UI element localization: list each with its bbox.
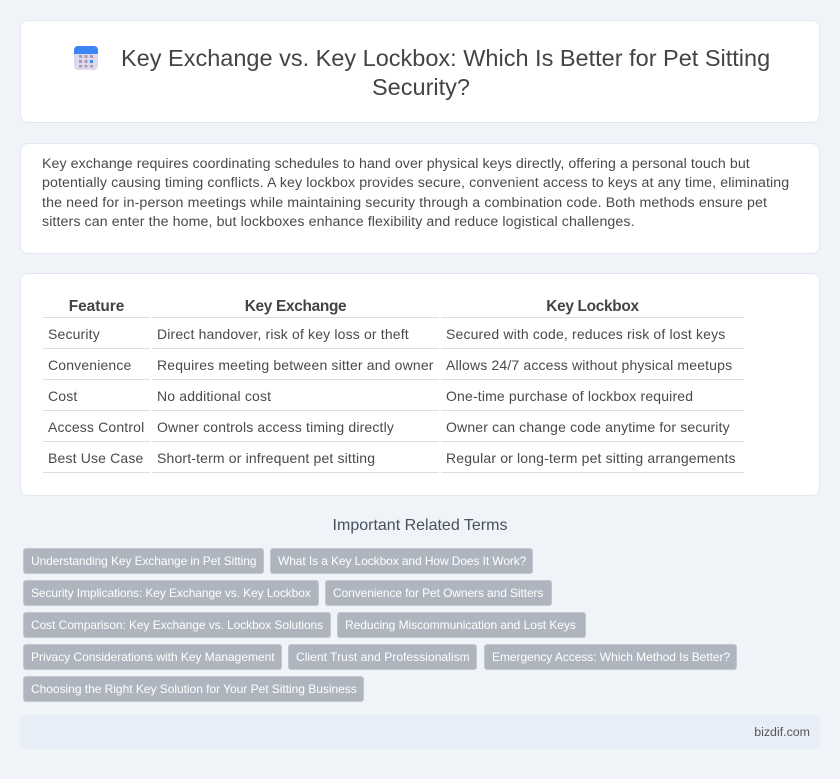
title <box>121 45 770 100</box>
row: cost <box>48 388 693 404</box>
tag: Understanding Key Exchange in Pet Sitting <box>31 554 256 568</box>
title: Security? <box>372 74 470 100</box>
tag <box>23 612 331 638</box>
tag <box>270 548 533 574</box>
intro text: potentially causing timing conflicts. A key lockbox provides secure, convenient access to keys at any time, eliminating <box>42 175 789 191</box>
row: cost: Cost <box>48 388 77 404</box>
related terms heading: Important Related Terms <box>333 517 507 534</box>
footer source: bizdif.com <box>754 725 810 739</box>
row: security: Security <box>48 326 100 342</box>
related terms tags <box>23 548 737 702</box>
row: best use case: Best Use Case <box>48 450 143 466</box>
table: Owner can change code anytime for security <box>446 419 730 435</box>
tag <box>23 548 264 574</box>
table: Direct handover, risk of key loss or theft <box>157 326 409 342</box>
row: access control: Access Control <box>48 419 144 435</box>
column heading: key exchange: Key Exchange <box>245 298 346 315</box>
table: No additional cost <box>157 388 271 404</box>
table: Secured with code, reduces risk of lost keys <box>446 326 725 342</box>
intro text: sitters can enter the home, but lockboxes enhance flexibility and reduce logistical challenges. <box>42 214 635 230</box>
tag: Emergency Access: Which Method Is Better? <box>492 650 730 664</box>
intro text: Key exchange requires coordinating schedules to hand over physical keys directly, offering a personal touch but <box>42 156 750 172</box>
table: Allows 24/7 access without physical meetups <box>446 357 732 373</box>
header panel <box>20 20 820 123</box>
panel: comparison table <box>20 273 820 496</box>
table: Regular or long-term pet sitting arrangements <box>446 450 736 466</box>
tag <box>23 676 364 702</box>
tag <box>325 580 552 606</box>
column heading: feature: Feature <box>69 298 124 315</box>
intro text: the need for in-person meetings while maintaining security through a combination code. Both methods ensure pet <box>42 195 767 211</box>
tag: Reducing Miscommunication and Lost Keys <box>345 618 576 632</box>
row: access control <box>48 419 730 435</box>
table <box>43 298 744 473</box>
table: Owner controls access timing directly <box>157 419 394 435</box>
table: Requires meeting between sitter and owner <box>157 357 434 373</box>
row: convenience <box>48 357 732 373</box>
tag <box>337 612 586 638</box>
intro text <box>42 156 789 230</box>
tag: Client Trust and Professionalism <box>296 650 470 664</box>
tag <box>288 644 477 670</box>
tag: Cost Comparison: Key Exchange vs. Lockbox Solutions <box>31 618 323 632</box>
table: Short-term or infrequent pet sitting <box>157 450 375 466</box>
panel: introduction <box>20 143 820 254</box>
column heading: key lockbox: Key Lockbox <box>546 298 639 315</box>
title: Key Exchange vs. Key Lockbox: Which Is Better for Pet Sitting <box>121 45 770 71</box>
tag: Convenience for Pet Owners and Sitters <box>333 586 543 600</box>
tag <box>23 644 282 670</box>
row: security <box>48 326 725 342</box>
footer bar <box>20 715 820 749</box>
table: One-time purchase of lockbox required <box>446 388 693 404</box>
tag: Security Implications: Key Exchange vs. Key Lockbox <box>31 586 311 600</box>
tag <box>484 644 737 670</box>
row: best use case <box>48 450 736 466</box>
tag: Privacy Considerations with Key Management <box>31 650 275 664</box>
icon: calendar <box>74 46 98 70</box>
tag: What Is a Key Lockbox and How Does It Work? <box>278 554 526 568</box>
tag <box>23 580 319 606</box>
row: convenience: Convenience <box>48 357 131 373</box>
tag: Choosing the Right Key Solution for Your Pet Sitting Business <box>31 682 357 696</box>
